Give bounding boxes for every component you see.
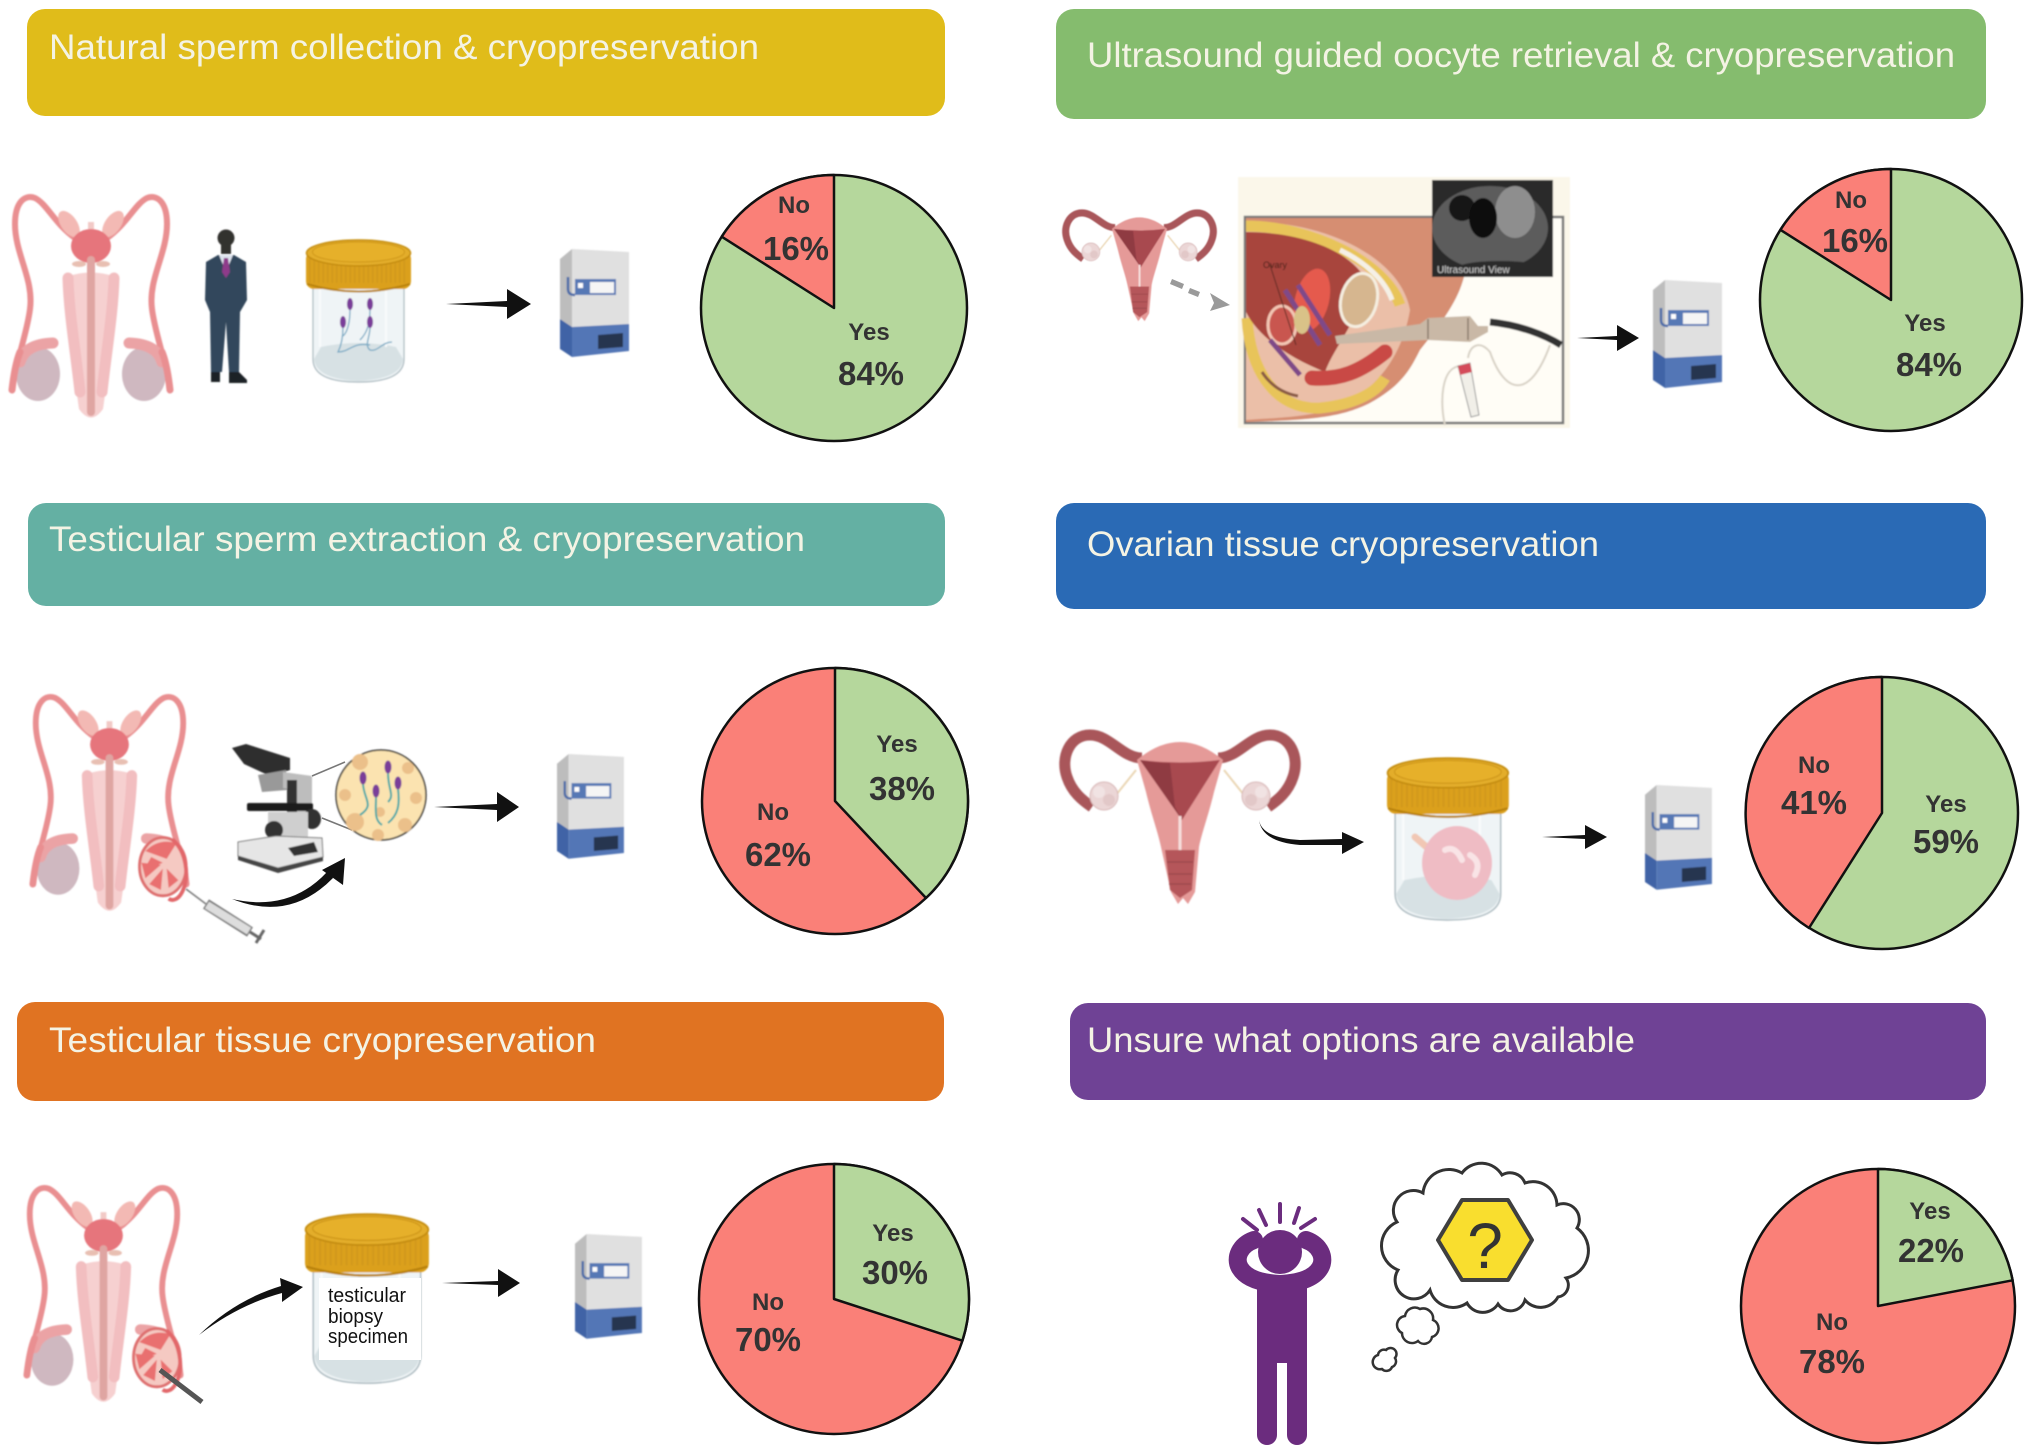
pie chart: 59% yes, 41% no: No: [1798, 752, 1830, 779]
icon: labelled specimen jar: testicular: [328, 1285, 406, 1307]
heading bar: unsure: Unsure what options are available: [1087, 1021, 1635, 1060]
panel: testicular tissue cryopreservation: [17, 1002, 969, 1434]
heading bar: ultrasound guided oocyte retrieval: Ultrasound guided oocyte retrieval & cryopreservation: [1087, 36, 1955, 75]
pie chart: 84% yes, 16% no: 16%: [1822, 222, 1888, 259]
pie chart: 30% yes, 70% no: [699, 1164, 969, 1434]
pie chart: 84% yes, 16% no: 84%: [838, 355, 904, 392]
zoom lines: [312, 762, 352, 830]
heading bar: testicular sperm extraction: Testicular sperm extraction & cryopreservation: [49, 520, 805, 559]
heading bar: unsure: [1070, 1003, 1986, 1100]
pie chart: 84% yes, 16% no: 84%: [1896, 346, 1962, 383]
pie chart: 84% yes, 16% no: 16%: [763, 230, 829, 267]
pie chart: 22% yes, 78% no: 78%: [1799, 1343, 1865, 1380]
icon: confused person: [1238, 1204, 1322, 1445]
icon: labelled specimen jar: biopsy: [328, 1306, 383, 1328]
pie chart: 30% yes, 70% no: 70%: [735, 1321, 801, 1358]
icon: biopsy needle: [160, 1370, 202, 1402]
icon: thought cloud with question mark: [1373, 1163, 1588, 1371]
icon: syringe: [186, 889, 264, 943]
pie chart: 59% yes, 41% no: [1746, 677, 2018, 949]
pie chart: 22% yes, 78% no: No: [1816, 1309, 1848, 1336]
arrow: [434, 792, 519, 822]
medical illustration: ultrasound guided retrieval: Ovary: [1263, 260, 1288, 270]
curved arrow: [232, 858, 345, 907]
pie chart: 30% yes, 70% no: Yes: [872, 1220, 914, 1247]
icon: male anatomy with biopsy: [27, 1188, 180, 1402]
curved arrow: [1259, 820, 1364, 854]
pie chart: 84% yes, 16% no: [1760, 169, 2022, 431]
pie chart: 22% yes, 78% no: [1741, 1169, 2015, 1443]
arrow: [1542, 825, 1607, 849]
arrow: [1577, 325, 1639, 351]
icon: freezer: [575, 1234, 642, 1339]
pie chart: 59% yes, 41% no: Yes: [1925, 791, 1967, 818]
pie chart: 22% yes, 78% no: Yes: [1909, 1198, 1951, 1225]
panel: testicular sperm extraction: [28, 503, 968, 943]
icon: male reproductive anatomy: [12, 197, 170, 418]
heading bar: ovarian tissue: Ovarian tissue cryopreservation: [1087, 525, 1599, 564]
pie chart: 84% yes, 16% no: No: [778, 192, 810, 219]
pie chart: 22% yes, 78% no: 22%: [1898, 1232, 1964, 1269]
curved arrow: [199, 1278, 303, 1335]
icon: microscope: [232, 744, 323, 873]
icon: jar with ovarian tissue: [1387, 758, 1509, 920]
pie chart: 30% yes, 70% no: 30%: [862, 1254, 928, 1291]
arrow: [442, 1269, 520, 1297]
pie chart: 38% yes, 62% no: [702, 668, 968, 934]
icon: freezer: [1653, 280, 1722, 388]
icon: freezer: [557, 754, 624, 859]
icon: thought cloud with question mark: ?: [1467, 1210, 1503, 1282]
heading bar: natural sperm collection: [27, 9, 945, 116]
pie chart: 84% yes, 16% no: No: [1835, 187, 1867, 214]
pie chart: 84% yes, 16% no: Yes: [1904, 310, 1946, 337]
heading bar: testicular tissue: [17, 1002, 944, 1101]
icon: magnified tissue with sperm: [336, 750, 426, 841]
pie chart: 59% yes, 41% no: 41%: [1781, 784, 1847, 821]
pie chart: 30% yes, 70% no: No: [752, 1289, 784, 1316]
icon: female reproductive anatomy: [1065, 735, 1295, 904]
panel: unsure what options are available: [1070, 1003, 2015, 1445]
icon: freezer: [560, 249, 629, 357]
pie chart: 59% yes, 41% no: 59%: [1913, 823, 1979, 860]
panel: ovarian tissue cryopreservation: [1056, 503, 2018, 949]
medical illustration: ultrasound guided retrieval: Ultrasound View: [1437, 265, 1510, 276]
icon: female reproductive anatomy: [1066, 213, 1213, 321]
pie chart: 38% yes, 62% no: No: [757, 799, 789, 826]
medical illustration: ultrasound guided retrieval: [1238, 177, 1570, 428]
heading bar: ultrasound guided oocyte retrieval: [1056, 9, 1986, 119]
heading bar: ovarian tissue: [1056, 503, 1986, 609]
icon: man in suit: [205, 230, 247, 383]
pie chart: 38% yes, 62% no: 62%: [745, 836, 811, 873]
panel: natural sperm collection: [12, 9, 967, 441]
pie chart: 84% yes, 16% no: [701, 175, 967, 441]
arrow: [446, 289, 531, 319]
heading bar: natural sperm collection: Natural sperm collection & cryopreservation: [49, 28, 759, 67]
icon: specimen jar with sperm: [306, 240, 411, 382]
heading bar: testicular sperm extraction: [28, 503, 945, 606]
pie chart: 38% yes, 62% no: 38%: [869, 770, 935, 807]
panel: oocyte retrieval: [1056, 9, 2022, 431]
icon: labelled specimen jar: specimen: [328, 1326, 408, 1348]
icon: freezer: [1645, 785, 1712, 890]
icon: male anatomy with sectioned testis: [33, 697, 186, 911]
icon: labelled specimen jar: [305, 1214, 429, 1383]
pie chart: 84% yes, 16% no: Yes: [848, 319, 890, 346]
heading bar: testicular tissue: Testicular tissue cryopreservation: [49, 1021, 596, 1060]
pie chart: 38% yes, 62% no: Yes: [876, 731, 918, 758]
dashed arrow: [1170, 279, 1230, 311]
